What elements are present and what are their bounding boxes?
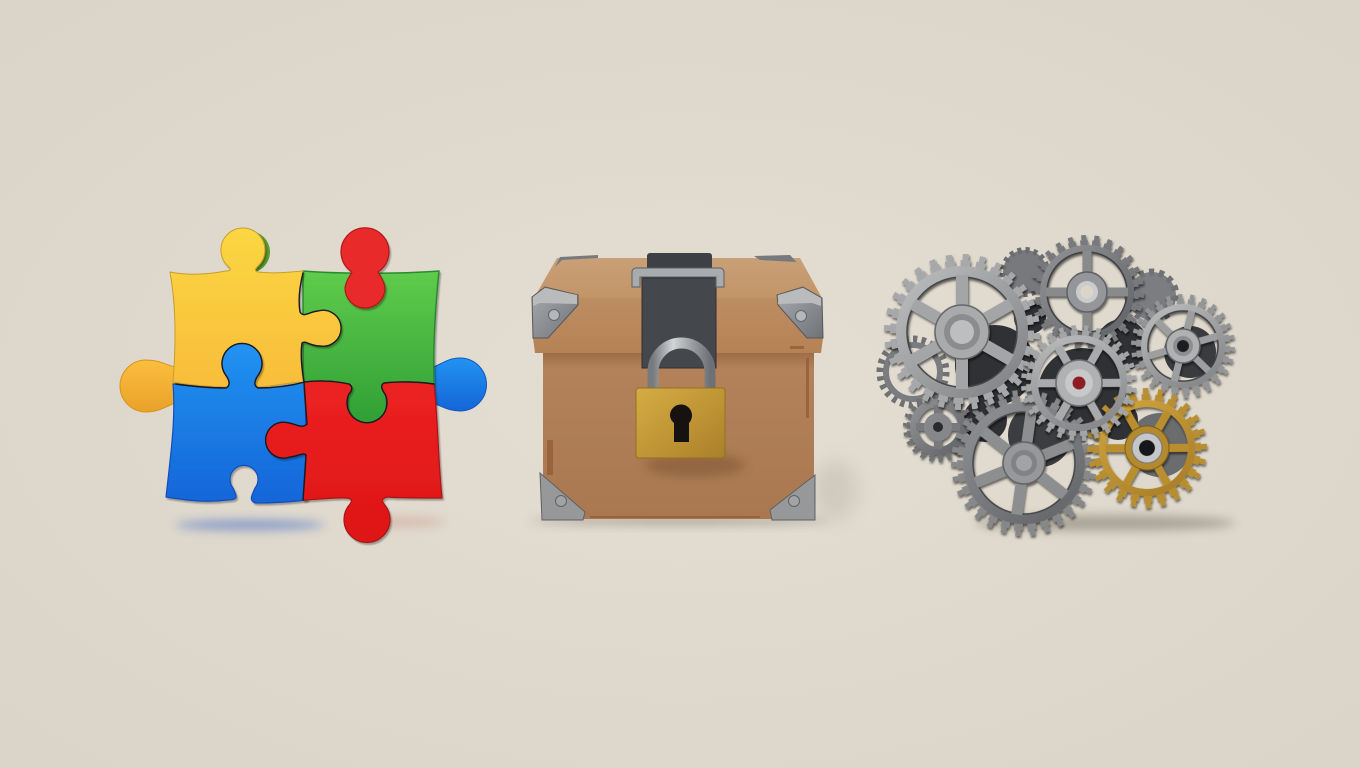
- puzzle: green edge behind yellow tab: [228, 231, 270, 273]
- gear: hidden left gear: [880, 339, 946, 405]
- puzzle: dark seams between pieces: [176, 273, 434, 500]
- puzzle: red piece: [266, 381, 442, 542]
- ground shadows: [175, 460, 1235, 531]
- box: lid corner bracket left: [532, 287, 578, 338]
- box: lid top: [534, 258, 822, 298]
- padlock keyhole: [670, 404, 692, 442]
- box: metal buckle: [632, 268, 724, 287]
- box: lid front: [533, 298, 823, 353]
- icon: locked box: [532, 253, 823, 520]
- padlock body: [636, 388, 725, 458]
- puzzle: orange left tab: [120, 360, 176, 412]
- gear: small left: [905, 394, 971, 460]
- box: strap behind buckle: [647, 253, 712, 274]
- puzzle: blue right tab: [430, 358, 486, 411]
- puzzle: yellow piece: [170, 228, 341, 387]
- box: scuff marks: [547, 346, 809, 518]
- box: bottom corner bracket left: [540, 473, 585, 520]
- gear: hidden right gear: [1128, 272, 1176, 320]
- box: body: [543, 352, 814, 519]
- puzzle: green piece: [303, 271, 439, 425]
- puzzle: red key tab in green piece: [341, 228, 389, 308]
- gear: center with red hub: [1003, 307, 1155, 459]
- box: back corner brackets: [555, 255, 800, 267]
- padlock: [636, 343, 745, 477]
- box: lid corner bracket right: [777, 287, 823, 338]
- gears: dark mechanism behind: [955, 302, 1216, 477]
- gear: gold: [1081, 382, 1213, 514]
- icon: jigsaw puzzle: [120, 228, 486, 542]
- box: bottom corner bracket right: [770, 475, 815, 520]
- gear: bottom large: [945, 384, 1103, 542]
- puzzle: blue piece: [166, 343, 307, 503]
- icon: gear cluster: [880, 238, 1243, 542]
- gear: large left: [887, 257, 1037, 407]
- padlock shadow on box: [645, 453, 745, 477]
- gear: right: [1123, 286, 1243, 406]
- padlock shackle: [653, 343, 710, 390]
- box: strap front: [642, 278, 716, 368]
- gear: hidden top gear: [1003, 250, 1047, 294]
- gear: top: [1032, 238, 1142, 346]
